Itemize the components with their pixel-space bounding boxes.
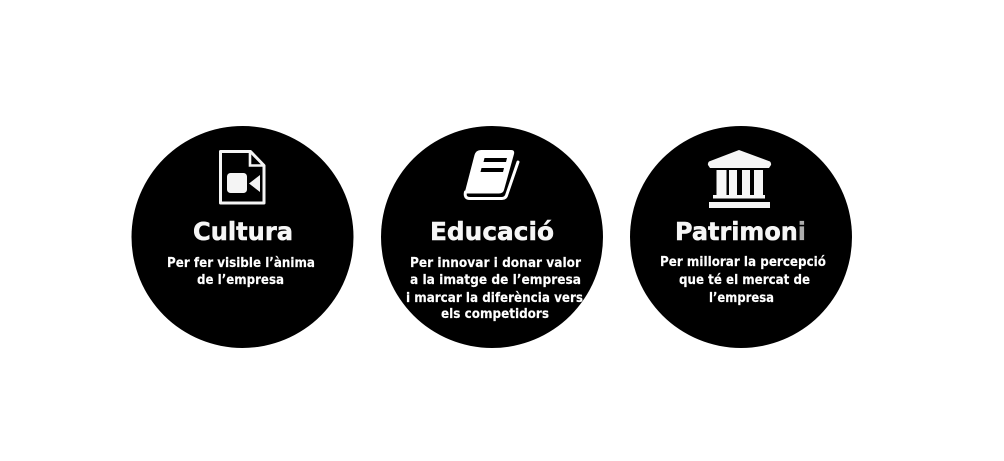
text: Educació description: i marcar la diferència vers [406, 290, 583, 306]
icon: classical building [708, 150, 771, 208]
icon: video document [220, 152, 264, 203]
panel: Educació [381, 126, 603, 348]
panel: Cultura [132, 126, 354, 348]
text: Cultura description [167, 255, 315, 288]
panel: Patrimoni [630, 126, 852, 348]
text: Educació description: Per innovar i donar valor [410, 255, 581, 271]
text: Patrimoni description: que té el mercat de [679, 272, 810, 288]
text: Cultura description: de l’empresa [197, 272, 284, 288]
heading: Cultura: Cultura [193, 217, 293, 246]
text: Patrimoni description: l’empresa [709, 290, 774, 306]
heading: Patrimoni: Patrimoni [675, 217, 806, 246]
text: Cultura description: Per fer visible l’ànima [167, 255, 315, 271]
text: Educació description: a la imatge de l’empresa [410, 272, 581, 288]
text: Educació description [406, 255, 583, 322]
heading: Educació: Educació [430, 217, 554, 246]
text: Patrimoni description: Per millorar la percepció [660, 254, 826, 270]
text: Educació description: els competidors [441, 306, 549, 322]
text: Patrimoni description [660, 254, 826, 306]
icon: book [464, 150, 518, 198]
